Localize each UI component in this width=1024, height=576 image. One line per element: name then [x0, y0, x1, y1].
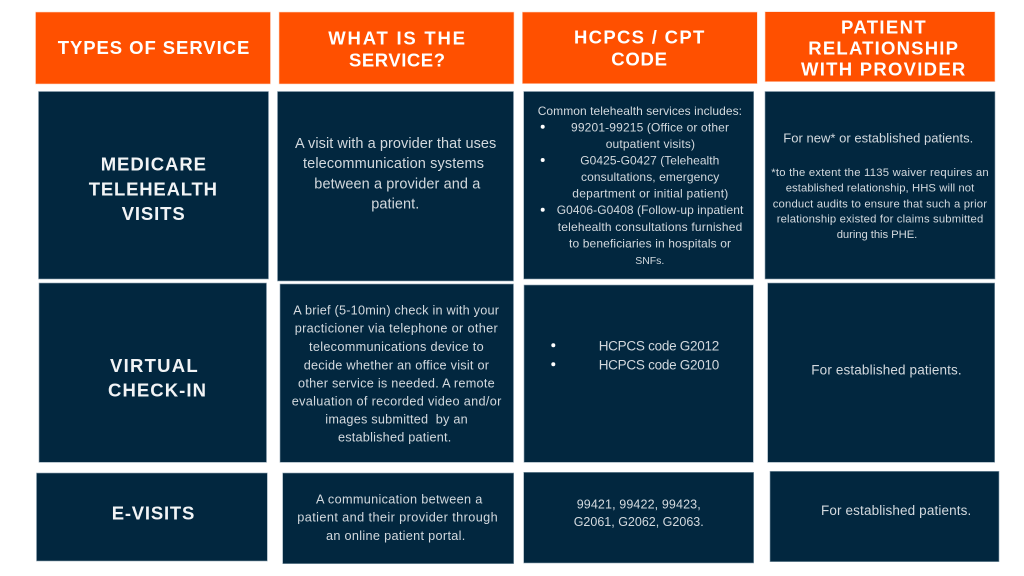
cell: medicare telehealth patient relationship: during this PHE. [837, 229, 917, 241]
cell: medicare telehealth patient relationship: *to the extent the 1135 waiver requires an [771, 167, 989, 179]
header: HCPCS / CPT code: CODE [611, 48, 667, 69]
header: patient relationship with provider: RELATIONSHIP [808, 37, 958, 58]
cell: virtual check-in description: established patient. [338, 431, 451, 445]
cell: virtual check-in description: other service is needed. A remote [298, 376, 495, 390]
header: patient relationship with provider [765, 12, 995, 82]
cell: e-visits description: patient and their provider through [297, 511, 498, 525]
cell: virtual check-in codes: HCPCS code G2012 [599, 338, 719, 353]
cell: medicare telehealth codes: consultations, emergency [581, 170, 719, 184]
header: types of service: TYPES OF SERVICE [58, 37, 249, 58]
cell: medicare telehealth patient relationship: relationship existed for claims submitted [777, 214, 983, 226]
header: patient relationship with provider: PATIENT [841, 16, 926, 37]
header: what is the service: WHAT IS THE [328, 28, 465, 49]
cell: e-visits codes: 99421, 99422, 99423, [577, 497, 701, 511]
cell: virtual check-in description [280, 284, 514, 462]
cell: medicare telehealth label: MEDICARE [101, 154, 206, 175]
cell: medicare telehealth patient relationship [765, 92, 995, 279]
row: e-visits [36, 471, 999, 564]
cell: virtual check-in patient relationship: For established patients. [811, 363, 962, 378]
row: virtual check-in [39, 283, 995, 462]
cell: medicare telehealth codes [524, 92, 754, 279]
cell: e-visits patient relationship [770, 471, 999, 562]
row: medicare telehealth visits [38, 92, 995, 281]
cell: virtual check-in description: evaluation of recorded video and/or [292, 394, 502, 408]
cell: medicare telehealth codes: Common telehealth services includes: [538, 104, 742, 118]
cell: medicare telehealth patient relationship: conduct audits to ensure that such a prior [773, 198, 987, 210]
cell: virtual check-in description: A brief (5-10min) check in with your [293, 304, 500, 318]
cell: e-visits label: E-VISITS [112, 502, 194, 523]
cell: medicare telehealth description: telecommunication systems [303, 156, 484, 172]
cell: e-visits description: A communication between a [316, 493, 483, 507]
cell: e-visits codes [524, 472, 754, 563]
cell: virtual check-in label: CHECK-IN [108, 380, 206, 401]
cell: e-visits codes: G2061, G2062, G2063. [574, 515, 704, 529]
cell: e-visits description: an online patient portal. [326, 529, 465, 543]
cell: virtual check-in patient relationship [768, 283, 995, 462]
cell: virtual check-in label: VIRTUAL [110, 355, 198, 376]
cell: medicare telehealth description: between a provider and a [314, 176, 481, 192]
cell: e-visits label [36, 473, 267, 561]
cell: medicare telehealth codes: to beneficiaries in hospitals or [569, 236, 731, 250]
cell: virtual check-in label [39, 283, 266, 462]
header: types of service [36, 12, 270, 84]
cell: medicare telehealth description [278, 92, 514, 281]
cell: e-visits patient relationship: For established patients. [821, 503, 971, 518]
cell: medicare telehealth codes: telehealth consultations furnished [558, 220, 742, 234]
cell: virtual check-in description: decide whether an office visit or [304, 358, 490, 372]
cell: virtual check-in description: telecommunications device to [309, 340, 484, 354]
cell: medicare telehealth description: patient. [371, 196, 419, 212]
cell: virtual check-in codes [524, 285, 753, 462]
cell: medicare telehealth patient relationship: For new* or established patients. [783, 131, 973, 146]
cell: medicare telehealth codes: G0425-G0427 (Telehealth [580, 154, 719, 168]
header: what is the service [279, 12, 514, 84]
cell: medicare telehealth codes: G0406-G0408 (Follow-up inpatient [557, 203, 744, 217]
cell: e-visits description [283, 473, 514, 564]
cell: medicare telehealth codes: outpatient visits) [606, 137, 695, 151]
cell: medicare telehealth patient relationship: established relationship, HHS will not [786, 183, 975, 195]
cell: virtual check-in description: images submitted by an [325, 413, 468, 427]
cell: medicare telehealth description: A visit with a provider that uses [295, 136, 496, 152]
header: what is the service: SERVICE? [349, 50, 445, 71]
cell: medicare telehealth label: VISITS [122, 203, 185, 224]
cell: medicare telehealth codes: department or initial patient) [572, 187, 728, 201]
header row [36, 12, 995, 84]
cell: medicare telehealth label [38, 92, 268, 279]
cell: medicare telehealth label: TELEHEALTH [89, 179, 217, 200]
cell: medicare telehealth codes: SNFs. [635, 255, 664, 267]
cell: medicare telehealth codes: 99201-99215 (Office or other [571, 120, 729, 134]
header: HCPCS / CPT code [522, 12, 757, 84]
header: patient relationship with provider: WITH PROVIDER [801, 58, 965, 79]
cell: virtual check-in codes: HCPCS code G2010 [599, 358, 719, 373]
header: HCPCS / CPT code: HCPCS / CPT [574, 27, 705, 48]
cell: virtual check-in description: practicioner via telephone or other [295, 322, 498, 336]
